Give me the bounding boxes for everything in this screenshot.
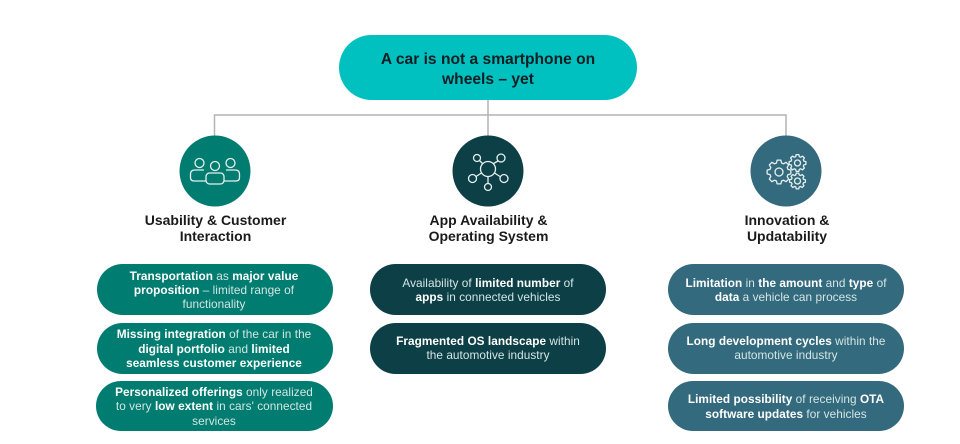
panel: app availability and operating system (370, 136, 606, 374)
pill: personalized offerings: Personalized offerings only realized (115, 385, 313, 399)
heading: app availability: App Availability & (430, 212, 547, 228)
panel: innovation and updatability (668, 136, 904, 431)
heading: app availability: Operating System (429, 228, 548, 244)
pill: fragmented OS: Fragmented OS landscape within (396, 334, 580, 348)
pill: fragmented OS (370, 323, 606, 374)
pill: missing integration: digital portfolio and limited (138, 342, 290, 356)
pill: data limitation (668, 264, 904, 315)
pill: data limitation: Limitation in the amount and type of (685, 276, 887, 290)
pill: missing integration (97, 323, 333, 374)
panel: usability and customer interaction (96, 136, 333, 431)
pill: development cycles (668, 323, 904, 374)
icon: group of people (180, 136, 250, 206)
pill: transportation: Transportation as major value (130, 269, 298, 283)
pill: data limitation: data a vehicle can process (715, 290, 857, 304)
pill: OTA updates: software updates for vehicles (705, 407, 867, 421)
heading: usability: Interaction (180, 228, 251, 244)
title pill: A car is not a smartphone on (381, 51, 595, 68)
title pill (339, 35, 637, 100)
pill: development cycles: automotive industry (734, 348, 838, 362)
pill: personalized offerings: to very low extent in cars' connected (116, 399, 312, 413)
pill: transportation (97, 264, 333, 315)
pill: transportation: proposition – limited range of (134, 283, 294, 297)
pill: development cycles: Long development cycles within the (686, 334, 886, 348)
pill: limited apps: Availability of limited number of (402, 276, 574, 290)
pill: missing integration: seamless customer experience (126, 356, 302, 370)
icon: gears (750, 136, 822, 206)
heading: innovation: Updatability (747, 228, 827, 244)
pill: transportation: functionality (183, 297, 246, 311)
pill: missing integration: Missing integration of the car in the (117, 327, 311, 341)
icon: network hub (452, 136, 524, 206)
heading: innovation: Innovation & (745, 212, 829, 228)
pill: personalized offerings (96, 381, 333, 431)
pill: OTA updates (668, 381, 904, 431)
pill: fragmented OS: the automotive industry (426, 348, 550, 362)
pill: limited apps (370, 264, 606, 315)
pill: personalized offerings: services (192, 414, 236, 428)
heading: usability: Usability & Customer (145, 212, 287, 228)
pill: limited apps: apps in connected vehicles (416, 290, 560, 304)
title pill: wheels – yet (441, 71, 534, 88)
pill: OTA updates: Limited possibility of receiving OTA (688, 392, 884, 406)
